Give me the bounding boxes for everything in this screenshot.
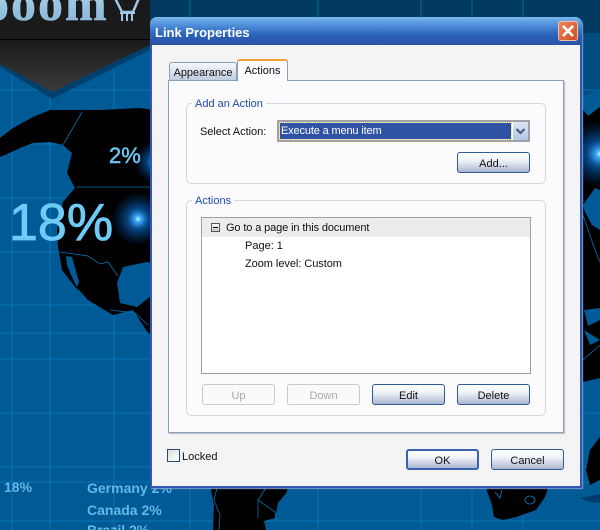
ranking list: Canada 2% xyxy=(87,502,162,518)
button: OK: OK xyxy=(435,455,450,467)
dropdown arrow xyxy=(513,122,528,140)
dialog: Link Properties xyxy=(150,17,582,488)
ranking list xyxy=(4,479,172,530)
selected option xyxy=(280,123,511,139)
tab panel xyxy=(168,80,564,433)
header banner xyxy=(0,0,150,99)
tab: Actions xyxy=(237,59,288,81)
title bar xyxy=(150,17,582,45)
icon: light bulb xyxy=(115,0,139,21)
tab: Appearance xyxy=(169,62,237,81)
map: South America xyxy=(210,485,288,530)
button: Down: Down xyxy=(309,390,338,402)
select box xyxy=(277,120,530,142)
detail: page: Page: 1 xyxy=(245,240,283,252)
checkbox: Locked xyxy=(167,449,217,463)
legend: Actions: Actions xyxy=(195,195,231,207)
tab: Appearance: Appearance xyxy=(174,67,232,79)
tab: Actions: Actions xyxy=(244,65,281,77)
button: Cancel: Cancel xyxy=(510,455,545,467)
value: 2%: 2% xyxy=(109,143,141,168)
close button xyxy=(558,21,578,41)
button: Delete xyxy=(457,384,530,405)
map: southern Africa xyxy=(486,488,548,520)
glow: Canada xyxy=(134,140,178,184)
button: Edit: Edit xyxy=(399,390,418,402)
glow: Europe xyxy=(566,120,600,188)
button: Up: Up xyxy=(231,390,246,402)
action name: Go to a page in this document xyxy=(226,222,369,234)
large value: 18%: 18% xyxy=(9,194,113,252)
label: Select Action: Select Action: xyxy=(200,126,266,138)
actions list xyxy=(201,217,531,374)
ranking list: Germany 2% xyxy=(87,480,172,496)
list header row xyxy=(202,218,530,237)
glow: United States xyxy=(111,192,165,246)
group: Add an Action xyxy=(186,103,546,184)
button: Delete: Delete xyxy=(478,390,509,402)
button: OK xyxy=(406,449,479,470)
button: Add xyxy=(457,152,530,173)
button: Cancel xyxy=(491,449,564,470)
button: Edit xyxy=(372,384,445,405)
map: Europe, Africa and Asia edge xyxy=(580,88,600,503)
dialog title: Link Properties xyxy=(155,25,250,40)
ranking list: 18% xyxy=(4,479,33,495)
checkbox box xyxy=(167,449,180,462)
map: North America xyxy=(0,108,155,335)
button: Up xyxy=(202,384,275,405)
checkbox label: Locked xyxy=(182,451,217,463)
icon: collapse xyxy=(211,223,220,232)
group: Actions xyxy=(186,200,546,416)
button: Add: Add... xyxy=(479,158,508,170)
detail: zoom level: Zoom level: Custom xyxy=(245,258,342,270)
legend: Add an Action: Add an Action xyxy=(195,98,263,110)
selected option: Execute a menu item xyxy=(281,125,381,137)
button: Down xyxy=(287,384,360,405)
